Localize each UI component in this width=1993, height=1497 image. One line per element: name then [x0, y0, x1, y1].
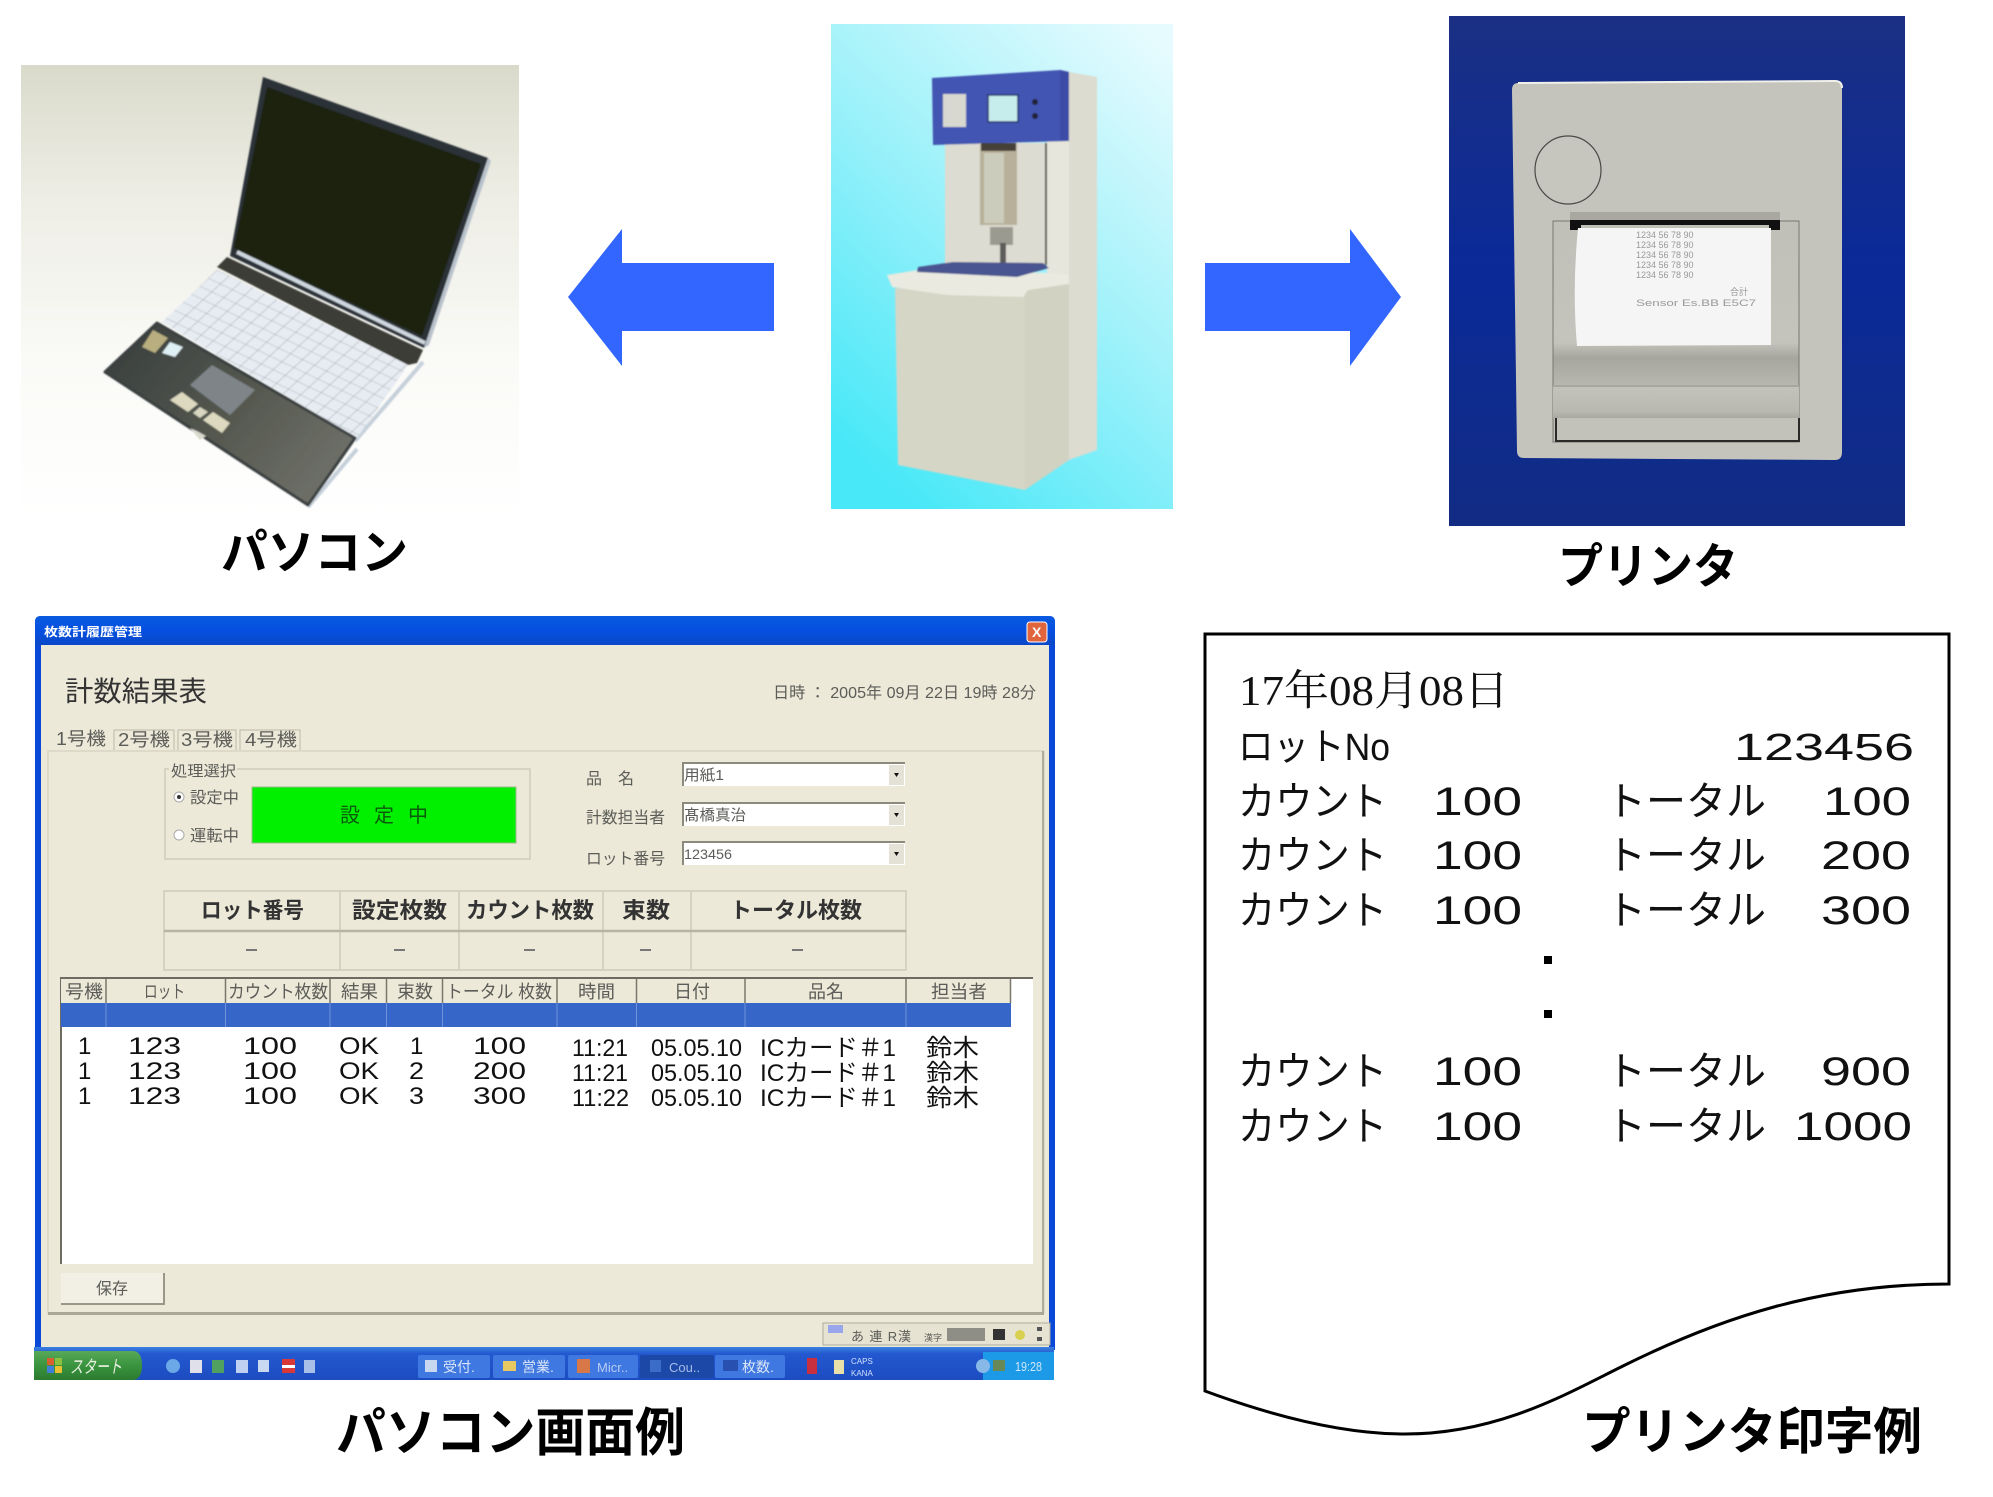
- window client area: [41, 645, 1049, 1347]
- notification icons: [807, 1358, 817, 1374]
- data rows: ICカード＃1: [760, 1060, 896, 1087]
- tabs: 4号機: [245, 730, 297, 750]
- data rows: 11:21: [572, 1035, 628, 1062]
- machine sensor unit: [980, 143, 1017, 225]
- receipt rows: トータル: [1606, 889, 1766, 933]
- printed paper text: [1636, 230, 1756, 308]
- data rows: 200: [473, 1058, 526, 1085]
- machine head indicator: [943, 94, 966, 127]
- photo: counting machine: [831, 24, 1173, 509]
- printer cutter bar: [1570, 220, 1780, 225]
- summary table: [164, 891, 906, 970]
- summary table: ロット番号: [201, 898, 304, 923]
- receipt continuation dots: [1544, 956, 1552, 1018]
- receipt rows: [1238, 780, 1912, 1149]
- list area: 時間: [578, 982, 615, 1002]
- task buttons: [418, 1355, 785, 1378]
- machine table: [887, 270, 1069, 297]
- taskbar: 19:28: [1015, 1359, 1042, 1374]
- task buttons: Cou..: [669, 1360, 700, 1375]
- printer button: [1535, 136, 1601, 204]
- list area: 号機: [65, 982, 103, 1002]
- tabs: [56, 729, 300, 750]
- list area: ロット: [144, 982, 185, 1002]
- task buttons: 受付.: [443, 1359, 475, 1375]
- summary table: トータル枚数: [730, 898, 862, 923]
- group: process selection: [165, 762, 530, 859]
- printed paper text: 1234 56 78 90: [1636, 240, 1694, 250]
- receipt rows: 200: [1821, 834, 1911, 878]
- data rows: 1: [78, 1033, 91, 1060]
- data rows: 123: [128, 1058, 181, 1085]
- receipt rows: カウント: [1238, 780, 1387, 824]
- laptop base edges: [308, 362, 423, 507]
- taskbar: CAPS: [851, 1357, 873, 1366]
- data rows: ICカード＃1: [760, 1035, 896, 1062]
- printed paper text: 1234 56 78 90: [1636, 260, 1694, 270]
- group: process selection: 設 定 中: [340, 804, 428, 827]
- data rows: 鈴木: [926, 1035, 979, 1062]
- form fields: 123456: [684, 846, 732, 862]
- heading: 計数結果表: 計数結果表: [65, 676, 207, 707]
- title bar: 枚数計履歴管理: [44, 624, 142, 639]
- laptop hinge: [217, 257, 423, 365]
- machine back column: [945, 143, 1047, 265]
- tabs: 3号機: [181, 730, 233, 750]
- receipt rows: カウント: [1238, 1105, 1387, 1149]
- receipt rows: 100: [1433, 834, 1522, 878]
- task buttons: 営業.: [522, 1359, 554, 1375]
- laptop stickers: [142, 330, 168, 353]
- data rows: 05.05.10: [651, 1085, 742, 1112]
- receipt rows: トータル: [1606, 780, 1766, 824]
- machine head panel: [932, 70, 1069, 145]
- data rows: 11:21: [572, 1060, 628, 1087]
- data rows: 1: [78, 1083, 91, 1110]
- window frame: [35, 616, 1055, 1350]
- photo: laptop computer: [21, 65, 519, 521]
- machine side column: [1069, 72, 1097, 460]
- photo: printer: [1449, 16, 1905, 526]
- receipt rows: トータル: [1606, 834, 1766, 878]
- save button: [61, 1273, 164, 1304]
- data rows: 1: [410, 1033, 423, 1060]
- data rows: 123: [128, 1033, 181, 1060]
- arrow: machine to printer: [1205, 229, 1401, 366]
- receipt rows: 100: [1433, 780, 1522, 824]
- save button: 保存: [96, 1280, 128, 1298]
- data rows: 3: [409, 1083, 424, 1110]
- tabs: 1号機: [56, 729, 106, 749]
- taskbar: スタート: [70, 1357, 122, 1377]
- machine base front: [895, 288, 1025, 490]
- form fields: [586, 763, 905, 868]
- label: プリンタ: プリンタ: [1558, 541, 1738, 594]
- data rows: 鈴木: [926, 1085, 979, 1112]
- machine head display: [988, 95, 1018, 122]
- laptop lid: [230, 77, 488, 348]
- arrow: machine to PC: [568, 229, 774, 366]
- task buttons: Micr..: [597, 1360, 628, 1375]
- machine base side: [1025, 278, 1069, 490]
- data rows: [78, 1033, 979, 1112]
- receipt rows: トータル: [1606, 1105, 1766, 1149]
- form fields: 用紙1: [684, 767, 724, 784]
- form fields: 髙橋真治: [684, 806, 746, 824]
- label: パソコン: パソコン: [221, 527, 408, 580]
- receipt lot number: 123456: [1734, 727, 1914, 769]
- quick launch icons: [166, 1359, 180, 1373]
- system tray: [983, 1352, 1054, 1380]
- title bar: X: [1032, 624, 1042, 640]
- laptop keyboard: [162, 270, 408, 438]
- tab panel: [48, 751, 1044, 1313]
- list header: [61, 979, 1011, 1003]
- green status box: [252, 787, 516, 843]
- tabs: 2号機: [118, 730, 170, 750]
- data rows: OK: [339, 1033, 379, 1060]
- data rows: ICカード＃1: [760, 1085, 896, 1112]
- group: process selection: 運転中: [190, 827, 239, 845]
- receipt rows: 100: [1433, 1105, 1522, 1149]
- data rows: OK: [339, 1058, 379, 1085]
- language bar: [823, 1323, 1050, 1345]
- data rows: 300: [473, 1083, 526, 1110]
- laptop touchpad: [190, 365, 255, 415]
- data rows: 100: [243, 1083, 297, 1110]
- taskbar: KANA: [851, 1369, 873, 1378]
- receipt outline: [1205, 634, 1949, 1434]
- summary table: 設定枚数: [352, 898, 447, 923]
- data rows: 100: [473, 1033, 526, 1060]
- data rows: 100: [243, 1033, 297, 1060]
- data rows: 2: [409, 1058, 424, 1085]
- printed paper text: Sensor Es.BB E5C7: [1636, 298, 1756, 308]
- data rows: OK: [339, 1083, 379, 1110]
- list area: [61, 978, 1033, 1264]
- receipt date: 17年08月08日: [1239, 668, 1509, 715]
- group: process selection: 設定中: [190, 789, 239, 807]
- printed paper text: 1234 56 78 90: [1636, 250, 1694, 260]
- panel: PC screen example: [34, 616, 1055, 1380]
- summary table: 束数: [622, 898, 670, 923]
- receipt rows: 100: [1433, 1050, 1522, 1094]
- label: パソコン画面例: パソコン画面例: [336, 1405, 685, 1463]
- printer perforation: [1570, 212, 1780, 220]
- start button: [34, 1351, 142, 1380]
- receipt rows: トータル: [1606, 1050, 1766, 1094]
- data rows: 1: [78, 1058, 91, 1085]
- receipt lot number: ロットNo: [1238, 727, 1390, 769]
- data rows: 05.05.10: [651, 1060, 742, 1087]
- laptop palm rest: [105, 323, 355, 505]
- list area: 品名: [808, 982, 844, 1002]
- receipt rows: カウント: [1238, 834, 1387, 878]
- machine blue plate: [917, 262, 1049, 277]
- form fields: ロット番号: [586, 850, 665, 868]
- laptop screen: [234, 87, 481, 336]
- form fields: 品 名: [586, 770, 634, 788]
- receipt rows: 900: [1821, 1050, 1911, 1094]
- receipt lot number: [1238, 727, 1914, 769]
- language bar: 漢字: [924, 1332, 942, 1343]
- title bar: [35, 616, 1055, 645]
- printer slot: [1553, 221, 1799, 442]
- printed paper text: 合計: [1730, 286, 1748, 297]
- taskbar: [34, 1347, 1054, 1380]
- language bar: あ 連 R漢: [851, 1329, 911, 1344]
- list area: 結果: [341, 982, 378, 1002]
- receipt rows: 100: [1823, 780, 1911, 824]
- label: プリンタ印字例: プリンタ印字例: [1582, 1404, 1922, 1460]
- printer faceplate: [1512, 81, 1842, 460]
- date time: 日時 ： 2005年 09月 22日 19時 28分: [773, 684, 1036, 702]
- receipt rows: 1000: [1794, 1105, 1912, 1149]
- printed paper text: 1234 56 78 90: [1636, 270, 1694, 280]
- receipt rows: 300: [1821, 889, 1911, 933]
- task buttons: 枚数.: [742, 1359, 774, 1375]
- data rows: 鈴木: [926, 1060, 979, 1087]
- data rows: 05.05.10: [651, 1035, 742, 1062]
- printed paper roll: [1575, 228, 1771, 346]
- list area: トータル 枚数: [446, 982, 552, 1002]
- panel: printed receipt example: [1205, 634, 1949, 1434]
- list area: カウント枚数: [228, 982, 328, 1002]
- list area: 担当者: [931, 982, 987, 1002]
- list area: 束数: [397, 982, 433, 1002]
- form fields: 計数担当者: [586, 809, 665, 827]
- summary table: カウント枚数: [466, 898, 594, 923]
- list area: 日付: [674, 982, 710, 1002]
- receipt rows: カウント: [1238, 889, 1387, 933]
- receipt rows: カウント: [1238, 1050, 1387, 1094]
- receipt rows: 100: [1433, 889, 1522, 933]
- printed paper text: 1234 56 78 90: [1636, 230, 1694, 240]
- selected blue row: [61, 1003, 1011, 1027]
- data rows: 11:22: [572, 1085, 629, 1112]
- group: process selection: 処理選択: [171, 763, 236, 780]
- data rows: 123: [128, 1083, 181, 1110]
- data rows: 100: [243, 1058, 297, 1085]
